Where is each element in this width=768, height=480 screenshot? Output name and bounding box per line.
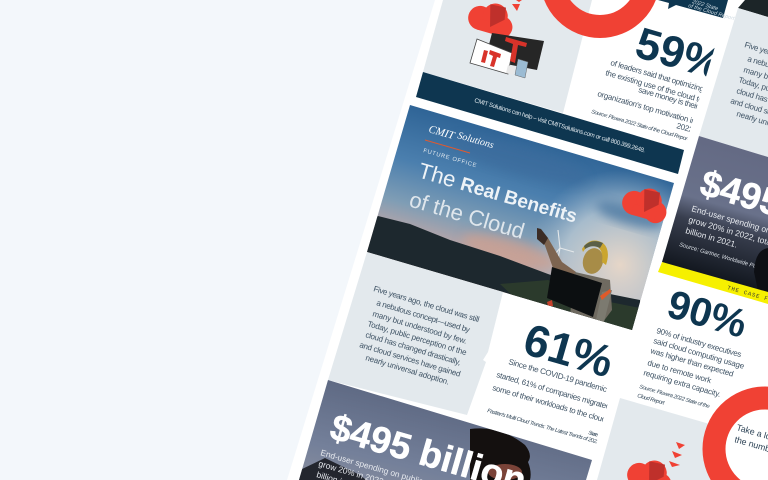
text: five years ago: and cloud services have gained <box>358 340 462 379</box>
text: 61% source: Fastian's Multi Cloud Trends: The Latest Trends of 2022 <box>486 408 600 446</box>
text: right end-user spending: billion in 2021. <box>684 225 739 250</box>
stat block: 61% <box>487 326 610 444</box>
text: five years ago repeat <box>729 40 768 143</box>
banner: navy contact bar: CMIT Solutions can help – visit CMITSolutions.com or call 800.399.2648. <box>473 97 646 155</box>
callout: top navy source bubble: of the Cloud Report <box>687 3 735 22</box>
text: 90% source: Cloud Report <box>636 393 665 407</box>
photo: dark hill <box>298 458 366 480</box>
text: 61% description: some of their workloads to the cloud <box>491 383 607 424</box>
text: 90% description: was higher than expected <box>648 346 735 379</box>
number: 59%: 59% <box>630 19 728 90</box>
icon: small red triangles <box>669 442 685 467</box>
icon: wind turbine <box>556 230 574 256</box>
callout: top navy source bubble <box>658 0 735 22</box>
icon: hero cloud <box>619 182 672 226</box>
text: five years ago: a nebulous concept—used by <box>375 298 471 334</box>
text: 90% description: requiring extra capacity. <box>642 368 722 399</box>
text: Future Office: FUTURE OFFICE <box>422 148 477 169</box>
chart: top donut <box>552 0 648 26</box>
text: 59% description: save money is their <box>637 85 700 111</box>
chart: bottom donut <box>714 398 768 480</box>
text: 90% description: 90% of industry executives <box>655 326 743 359</box>
banner: yellow case strip <box>658 262 768 305</box>
text: five years ago: many but understood by few. <box>371 309 468 346</box>
logo: CMIT Solutions: Solutions <box>456 130 495 151</box>
panel: $495 billion photo <box>298 380 592 480</box>
text: five years ago: cloud has changed drastically, <box>364 330 462 367</box>
text: 90% description: said cloud computing usage <box>652 336 746 371</box>
text: five years ago: nearly universal adoption. <box>364 353 450 387</box>
text: 61% description <box>492 359 608 422</box>
text: 90% source: Source: Flexera 2022 State of the <box>638 384 710 410</box>
panel: bottom right gray <box>597 398 768 480</box>
photo: dark hills <box>367 216 640 330</box>
text: 59% description: the existing use of the cloud to <box>604 68 705 105</box>
text: donut caption <box>733 422 768 458</box>
panel: intro text <box>328 252 503 415</box>
number: 90%: 90% <box>663 282 752 347</box>
logo: CMIT Solutions: CMIT <box>427 123 457 142</box>
left background band <box>0 0 435 480</box>
heading: The Real Benefits of the Cloud: The Real Benefits <box>416 158 580 228</box>
text: 90% description: due to remote work <box>646 358 713 385</box>
text: five years ago: Five years ago, the cloud was still <box>372 284 481 324</box>
logo: CMIT Solutions <box>425 123 495 153</box>
panel: right $495 photo <box>662 136 768 302</box>
text: 61% source: Source <box>587 430 599 439</box>
text: 59% description: of leaders said that optimizing <box>609 58 705 94</box>
icon: small red triangles <box>512 0 522 11</box>
photo: person silhouette <box>470 428 531 480</box>
text: five years ago <box>358 284 481 387</box>
photo: right person silhouette <box>754 248 768 302</box>
text: 59% description: organization's top motivation in <box>596 89 697 126</box>
icon: bottom cloud <box>624 454 677 480</box>
text: 59% description: 2022 <box>675 121 695 135</box>
icon: top cloud <box>465 0 518 41</box>
stat block: 90% <box>636 282 752 410</box>
text: 90% description <box>642 326 746 399</box>
text: 61% description: started, 61% of companies migrated <box>495 370 611 411</box>
panel: right column intro <box>699 8 768 157</box>
panel: top gray device panel <box>423 0 592 113</box>
panel: hero photo <box>367 105 674 330</box>
text: 59% description <box>596 58 705 135</box>
heading: The Real Benefits of the Cloud: of the Cloud <box>407 187 528 244</box>
text: 61% description: Since the COVID-19 pandemic <box>507 357 608 394</box>
panel: right column hero remnant <box>738 0 768 17</box>
number: 61%: 61% <box>518 314 619 387</box>
text: 59% source: Source: Flexera 2022 State of the Cloud Report <box>590 109 690 143</box>
icon: devices with IT logo <box>470 33 544 78</box>
stat block: 59% <box>591 28 715 140</box>
banner: navy contact bar <box>416 72 684 174</box>
text: five years ago: Today, public perception of the <box>366 319 468 357</box>
photo: worker raising arm <box>537 228 612 326</box>
photo: dusk sky glow <box>540 174 672 302</box>
